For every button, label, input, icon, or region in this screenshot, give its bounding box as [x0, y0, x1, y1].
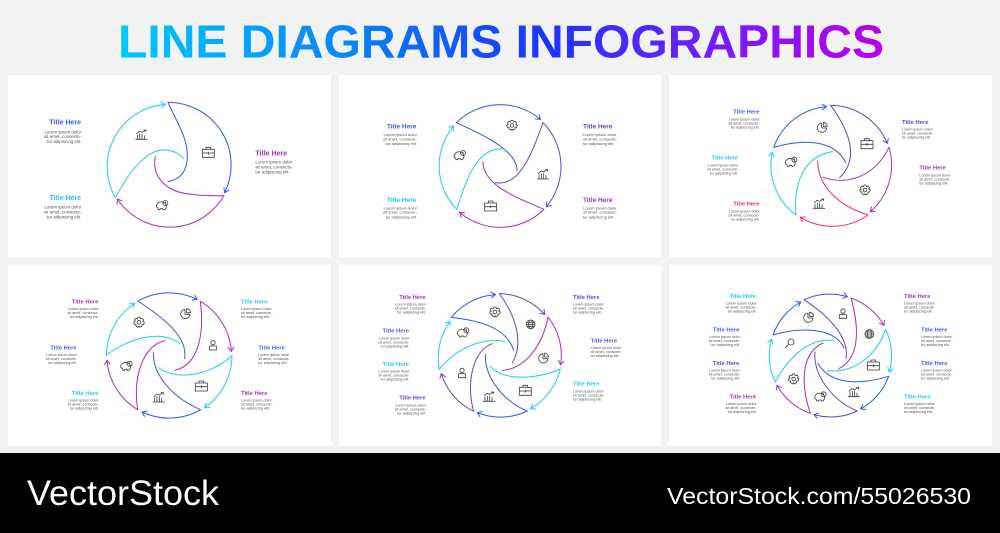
text block: violet title left: tur adipiscing elit.	[711, 377, 740, 381]
icon: piggy bank	[785, 157, 797, 166]
text block: blue title: Lorem ipsum dolor	[729, 117, 760, 121]
segment: cyan arrow lower right	[490, 366, 560, 409]
icon: gear	[134, 317, 144, 327]
text block: purple title bottom left: Lorem ipsum dolor	[726, 402, 757, 406]
text block: cyan title lower left: Lorem ipsum dolor	[68, 399, 99, 403]
text block: blue title right: Title Here	[591, 338, 618, 344]
footer logo text: VectorStock	[27, 474, 220, 513]
text block: cyan title: tur adipiscing elit.	[710, 171, 738, 175]
icon: piggy bank	[457, 328, 469, 337]
text block: violet title bottom left: Title Here	[399, 396, 426, 402]
icon: pie chart	[539, 353, 549, 363]
text block: purple title top left: Lorem ipsum dolor	[395, 303, 427, 307]
icon: pie chart	[181, 309, 191, 319]
panel: seven-step diagram	[339, 265, 661, 446]
title: LINE DIAGRAMS INFOGRAPHICS	[118, 16, 884, 68]
text block: purple title top right: sit amet, consecte-	[904, 306, 936, 310]
text block: purple title: Lorem ipsum dolor	[919, 173, 951, 177]
text block: violet title: Title Here	[902, 120, 929, 126]
text block: violet title top right: Lorem ipsum dolor	[573, 303, 605, 307]
text block: violet title: tur adipiscing elit.	[902, 136, 931, 140]
text block: blue title: Title Here	[49, 120, 81, 127]
text block: cyan title: sit amet, consecte-	[44, 209, 82, 214]
icon: chart	[483, 392, 495, 401]
text block: violet title left: sit amet, consecte-	[709, 373, 741, 377]
segment: cyan arrow left	[438, 321, 505, 369]
text block: blue title right: sit amet, consecte-	[591, 350, 623, 354]
text block: blue title right: Lorem ipsum dolor	[591, 346, 622, 350]
text block: blue title right lower: sit amet, consecte-	[921, 373, 953, 377]
text block: violet title: Title Here	[583, 124, 613, 131]
text block: purple title bottom left: sit amet, consecte-	[725, 406, 757, 410]
text block: blue title: tur adipiscing elit.	[47, 139, 81, 144]
text block: blue title left: Title Here	[50, 345, 77, 351]
text block: cyan title: Lorem ipsum dolor	[708, 163, 739, 167]
text block: violet title: sit amet, consecte-	[902, 132, 934, 136]
icon: gear	[860, 185, 870, 195]
text block: blue title left: Lorem ipsum dolor	[46, 353, 78, 357]
text block: purple title: sit amet, consecte-	[919, 177, 951, 181]
text block: cyan title bottom right: tur adipiscing elit.	[904, 410, 933, 414]
segment: violet arrow	[495, 123, 561, 207]
icon: gear	[788, 374, 799, 384]
text block: violet title: Lorem ipsum dolor	[902, 128, 934, 132]
segment: cyan arrow	[439, 126, 504, 209]
text block: violet title: sit amet, consecte-	[583, 136, 618, 141]
icon: briefcase	[519, 385, 531, 395]
text block: pink title: sit amet, consecte-	[728, 213, 760, 217]
text block: pink title: Title Here	[733, 202, 760, 208]
text block: cyan title: Title Here	[49, 195, 81, 202]
text block: blue title right: tur adipiscing elit.	[258, 361, 287, 365]
text block: violet title bottom left: Lorem ipsum dolor	[395, 403, 427, 407]
text block: cyan title lower left: tur adipiscing elit.	[70, 407, 99, 411]
text block: cyan title lower right: Lorem ipsum dolor	[573, 389, 605, 393]
segment: pink arrow	[800, 161, 868, 226]
text block: purple title: sit amet, consecte-	[583, 210, 618, 215]
text block: blue title right: Lorem ipsum dolor	[258, 353, 290, 357]
text block: blue title left: Lorem ipsum dolor	[379, 336, 410, 340]
panel: three-step diagram	[8, 75, 331, 257]
text block: purple title: tur adipiscing elit.	[583, 214, 614, 219]
segment: purple arrow top right	[839, 298, 884, 369]
panel: four-step diagram	[339, 75, 661, 257]
text block: cyan title bottom right: sit amet, consecte-	[904, 406, 936, 410]
text block: violet title: tur adipiscing elit.	[583, 141, 614, 146]
icon: person	[839, 309, 847, 318]
segment: cyan arrow upper left	[106, 303, 180, 355]
text block: blue title right upper: Title Here	[921, 327, 948, 333]
segment: blue arrow	[456, 105, 540, 171]
text block: cyan title left: Title Here	[383, 362, 410, 368]
text block: cyan title left: Lorem ipsum dolor	[379, 370, 410, 374]
text block: blue title right: Title Here	[258, 345, 286, 351]
text block: blue title right upper: Lorem ipsum dolor	[921, 335, 953, 339]
segment: blue arrow top left	[451, 295, 514, 350]
segment: violet arrow top right	[499, 294, 545, 363]
segment: purple arrow	[823, 147, 892, 212]
segment: violet arrow	[831, 105, 887, 178]
text block: violet title bottom left: tur adipiscing elit.	[397, 411, 426, 415]
segment: cyan arrow right	[827, 329, 892, 372]
segment: purple arrow	[460, 162, 544, 227]
text block: violet title top right: Title Here	[573, 295, 600, 301]
text block: purple title: tur adipiscing elit.	[255, 169, 290, 174]
text block: purple title lower right: Lorem ipsum dolor	[241, 399, 273, 403]
segment: purple arrow right	[502, 317, 561, 370]
footer bar	[0, 453, 1000, 533]
text block: cyan title: tur adipiscing elit.	[47, 214, 81, 219]
text block: blue title left: tur adipiscing elit.	[381, 344, 409, 348]
segment: blue arrow	[168, 102, 231, 193]
text block: purple title upper left: tur adipiscing elit.	[70, 315, 99, 319]
segment: blue arrow top	[138, 293, 197, 359]
text block: blue title right upper: tur adipiscing elit.	[921, 343, 950, 347]
icon: magnifier	[785, 339, 794, 348]
segment: cyan arrow	[107, 104, 184, 198]
text block: cyan title top left: tur adipiscing elit.	[728, 310, 757, 314]
text block: violet title top right: tur adipiscing elit.	[573, 311, 602, 315]
text block: cyan title: Title Here	[712, 156, 739, 162]
text block: blue title right lower: Title Here	[921, 361, 948, 367]
text block: blue title left: tur adipiscing elit.	[711, 343, 740, 347]
icon: briefcase	[867, 360, 879, 370]
text block: blue title right lower: Lorem ipsum dolor	[921, 369, 953, 373]
text block: cyan title: sit amet, consecte-	[383, 210, 418, 215]
text block: blue title left: Lorem ipsum dolor	[709, 335, 741, 339]
text block: violet title: Lorem ipsum dolor	[583, 132, 617, 137]
text block: pink title: tur adipiscing elit.	[731, 217, 760, 221]
footer url text: VectorStock.com/55026530	[667, 483, 971, 509]
segment: purple arrow right	[175, 301, 231, 370]
text block: violet title bottom left: sit amet, consecte-	[395, 407, 427, 411]
text block: cyan title upper right: Lorem ipsum dolor	[241, 307, 273, 311]
text block: blue title right: sit amet, consecte-	[258, 357, 290, 361]
text block: blue title: sit amet, consecte-	[728, 121, 760, 125]
text block: blue title: tur adipiscing elit.	[386, 141, 417, 146]
text block: purple title upper left: Title Here	[72, 299, 99, 305]
icon: person	[209, 340, 217, 350]
text block: cyan title top left: sit amet, consecte-	[725, 306, 757, 310]
icon: briefcase	[195, 381, 207, 391]
text block: purple title bottom left: Title Here	[730, 394, 757, 400]
icon: piggy bank	[815, 392, 826, 401]
text block: cyan title: sit amet, consecte-	[707, 167, 739, 171]
segment: blue arrow lower right	[818, 364, 889, 409]
icon: piggy bank	[454, 150, 465, 160]
text block: blue title: sit amet, consecte-	[383, 136, 418, 141]
icon: piggy bank	[121, 361, 132, 370]
text block: blue title right upper: sit amet, consecte-	[921, 339, 953, 343]
text block: cyan title lower right: tur adipiscing elit.	[573, 397, 602, 401]
icon: globe	[865, 330, 874, 338]
segment: violet arrow lower left	[441, 344, 492, 411]
text block: cyan title left: tur adipiscing elit.	[381, 378, 409, 382]
text block: purple title: Title Here	[919, 166, 947, 172]
icon: pie chart	[804, 312, 814, 322]
segment: cyan arrow	[771, 152, 832, 215]
text block: cyan title bottom right: Lorem ipsum dolor	[904, 402, 936, 406]
icon: briefcase	[861, 139, 873, 149]
icon: gear	[507, 120, 517, 130]
text block: cyan title: Title Here	[387, 197, 417, 204]
segment: blue arrow	[774, 107, 846, 162]
icon: piggy bank	[156, 200, 168, 210]
icon: chart	[136, 130, 147, 139]
icon: chart	[848, 387, 860, 397]
text block: purple title top right: tur adipiscing elit.	[904, 310, 933, 314]
text block: purple title: Lorem ipsum dolor	[583, 205, 617, 210]
icon: person	[458, 368, 466, 378]
text block: purple title top right: Lorem ipsum dolor	[904, 302, 936, 306]
text block: purple title upper left: Lorem ipsum dolor	[68, 307, 99, 311]
text block: purple title top left: Title Here	[399, 295, 426, 301]
text block: cyan title upper right: sit amet, consecte-	[241, 311, 273, 315]
text block: blue title left: sit amet, consecte-	[46, 357, 78, 361]
panel: six-step diagram	[8, 265, 331, 446]
text block: purple title: Title Here	[583, 197, 613, 204]
text block: cyan title: Lorem ipsum dolor	[44, 204, 82, 209]
segment: purple arrow left	[107, 341, 165, 410]
text block: cyan title lower right: Title Here	[573, 382, 600, 388]
text block: purple title upper left: sit amet, consecte-	[67, 311, 99, 315]
text block: blue title: Lorem ipsum dolor	[44, 129, 82, 134]
text block: violet title left: Lorem ipsum dolor	[709, 369, 741, 373]
text block: cyan title lower left: sit amet, consecte-	[67, 403, 99, 407]
text block: blue title: Lorem ipsum dolor	[383, 132, 418, 137]
panel: eight-step diagram	[669, 265, 992, 446]
text block: purple title top right: Title Here	[904, 294, 931, 300]
text block: cyan title left: sit amet, consecte-	[378, 374, 410, 378]
segment: cyan arrow lower right	[159, 356, 232, 408]
text block: cyan title lower left: Title Here	[72, 391, 99, 397]
text block: purple title lower right: sit amet, consecte-	[241, 403, 273, 407]
icon: chart	[537, 170, 549, 179]
text block: cyan title upper right: Title Here	[241, 299, 268, 305]
segment: purple arrow lower left	[777, 343, 823, 413]
text block: violet title left: Title Here	[713, 361, 740, 367]
text block: purple title: Title Here	[255, 150, 287, 157]
text block: purple title: Lorem ipsum dolor	[255, 160, 293, 165]
text block: blue title right lower: tur adipiscing elit.	[921, 377, 950, 381]
text block: cyan title upper right: tur adipiscing elit.	[241, 315, 270, 319]
icon: chart	[813, 199, 825, 208]
segment: violet arrow bottom	[814, 352, 857, 417]
text block: purple title top left: sit amet, consecte-	[395, 307, 427, 311]
text block: cyan title top left: Lorem ipsum dolor	[726, 302, 757, 306]
text block: purple title lower right: Title Here	[241, 391, 268, 397]
text block: blue title left: Title Here	[383, 329, 410, 335]
text block: blue title: sit amet, consecte-	[44, 134, 82, 139]
text block: purple title: tur adipiscing elit.	[919, 181, 948, 185]
segment: violet arrow top	[804, 294, 847, 359]
text block: cyan title top left: Title Here	[730, 294, 757, 300]
text block: blue title right: tur adipiscing elit.	[591, 354, 619, 358]
text block: pink title: Lorem ipsum dolor	[729, 209, 760, 213]
text block: violet title top right: sit amet, consecte-	[573, 307, 605, 311]
panel: five-step diagram	[669, 75, 992, 257]
text block: blue title left: sit amet, consecte-	[709, 339, 741, 343]
segment: blue arrow bottom	[477, 354, 527, 417]
text block: blue title: Title Here	[387, 124, 417, 131]
text block: blue title: Title Here	[733, 110, 760, 116]
segment: blue arrow bottom	[142, 353, 201, 418]
text block: cyan title bottom right: Title Here	[904, 394, 931, 400]
segment: cyan arrow left	[769, 339, 834, 382]
text block: cyan title: tur adipiscing elit.	[386, 214, 417, 219]
text block: blue title left: sit amet, consecte-	[378, 340, 410, 344]
icon: globe	[526, 320, 535, 329]
icon: briefcase	[485, 201, 497, 211]
text block: purple title: sit amet, consecte-	[255, 164, 293, 169]
text block: purple title top left: tur adipiscing elit.	[397, 311, 426, 315]
icon: pie chart	[817, 122, 827, 132]
text block: purple title bottom left: tur adipiscing elit.	[728, 410, 757, 414]
icon: gear	[490, 307, 500, 317]
icon: briefcase	[202, 147, 214, 157]
text block: purple title lower right: tur adipiscing elit.	[241, 407, 270, 411]
text block: cyan title lower right: sit amet, consecte-	[573, 393, 605, 397]
icon: chart	[153, 393, 164, 402]
segment: blue arrow upper left	[773, 302, 844, 348]
text block: blue title left: Title Here	[713, 327, 740, 333]
text block: cyan title: Lorem ipsum dolor	[383, 205, 418, 210]
text block: blue title: tur adipiscing elit.	[731, 125, 760, 129]
text block: blue title left: tur adipiscing elit.	[48, 361, 77, 365]
segment: purple arrow	[117, 157, 224, 227]
